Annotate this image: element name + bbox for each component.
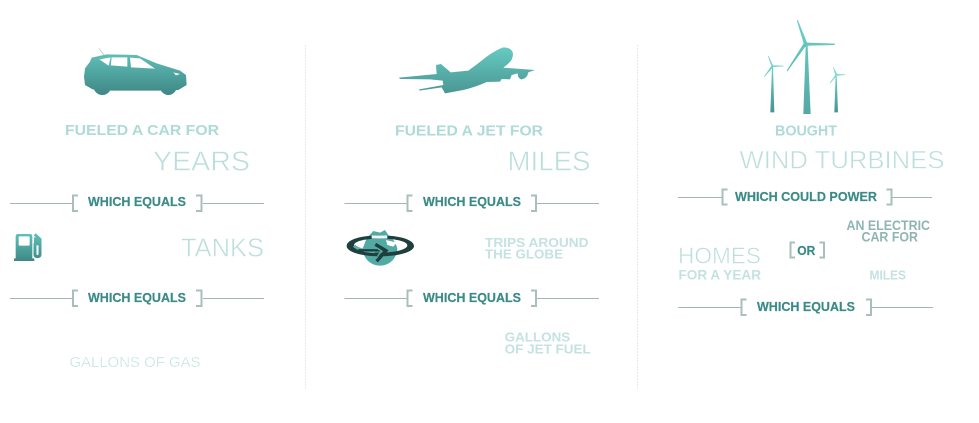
divider: which equals: WHICH EQUALS — [757, 300, 855, 314]
icon: wind turbines — [764, 20, 845, 114]
icon: jet — [399, 47, 535, 93]
text: trips around the globe: TRIPS AROUND — [485, 235, 588, 250]
label: or — [790, 242, 824, 258]
panel: car — [10, 48, 264, 371]
divider: which could power — [678, 190, 932, 204]
heading: fueled a jet for: FUELED A JET FOR — [395, 124, 544, 140]
divider: which could power: WHICH COULD POWER — [735, 190, 877, 204]
divider: which equals: WHICH EQUALS — [423, 195, 521, 209]
icon: fuel pump — [14, 234, 40, 261]
panel: wind turbines — [678, 20, 944, 315]
text: gallons of jet fuel — [505, 330, 591, 356]
text: gallons of jet fuel: OF JET FUEL — [505, 341, 591, 356]
text: miles: MILES — [508, 146, 590, 176]
text: trips around the globe — [485, 235, 588, 262]
divider: which equals — [344, 290, 599, 306]
icon: globe with orbit — [347, 230, 414, 266]
text: homes for a year: HOMES — [678, 242, 761, 268]
divider: which equals — [10, 195, 264, 211]
text: gallons of jet fuel: GALLONS — [505, 330, 571, 345]
heading: fueled a car for: FUELED A CAR FOR — [65, 123, 220, 139]
divider: column one — [304, 45, 306, 390]
divider: which equals — [678, 300, 933, 315]
icon: car — [84, 48, 187, 95]
text: tanks: TANKS — [181, 234, 264, 262]
divider: which equals: WHICH EQUALS — [423, 291, 521, 305]
panel: jet — [344, 47, 599, 356]
divider: which equals: WHICH EQUALS — [88, 291, 186, 305]
divider: which equals — [10, 290, 264, 306]
text: trips around the globe: THE GLOBE — [485, 247, 563, 262]
label: or: OR — [797, 244, 815, 258]
text: homes for a year: FOR A YEAR — [678, 266, 761, 282]
text: wind turbines: WIND TURBINES — [740, 147, 944, 175]
divider: which equals — [344, 195, 599, 211]
text: an electric car for — [846, 217, 930, 245]
text: an electric car for: AN ELECTRIC — [846, 217, 930, 233]
text: homes for a year — [678, 242, 761, 282]
text: an electric car for: CAR FOR — [862, 229, 918, 245]
text: years: YEARS — [153, 146, 250, 176]
divider: which equals: WHICH EQUALS — [88, 195, 186, 209]
heading: bought: BOUGHT — [775, 123, 837, 139]
text: miles: MILES — [870, 268, 906, 282]
divider: column two — [636, 45, 638, 390]
text: gallons of gas: GALLONS OF GAS — [70, 355, 200, 371]
